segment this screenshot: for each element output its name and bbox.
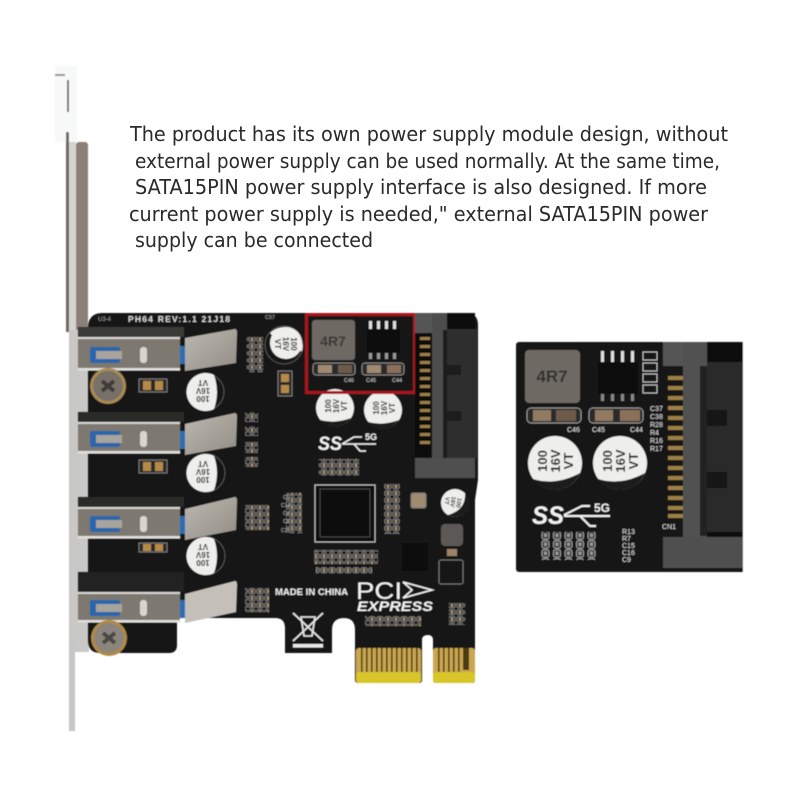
power module: controller chip (367, 321, 400, 359)
PCI Express logo (356, 578, 433, 614)
inset: inductor: 4R7 (536, 367, 568, 386)
SuperSpeed logo: SS (318, 434, 342, 455)
inset: component labels: R13 (622, 529, 635, 536)
capacitor: lower right: 100 (454, 497, 462, 509)
inset: component labels: C16 (622, 550, 635, 557)
power module: inductor (312, 320, 355, 360)
power module: small capacitors: C46 (344, 378, 354, 384)
main controller chip (315, 485, 375, 542)
inset: SuperSpeed logo: SS (532, 502, 564, 530)
capacitor: left 3 (187, 537, 225, 575)
inset: capacitor 2: 16V (613, 449, 628, 473)
inset: SuperSpeed logo: 5G (594, 501, 610, 515)
SATA connector (415, 313, 477, 478)
inset: capacitor 1: 16V (548, 449, 563, 473)
pad labels: C4 (283, 511, 290, 517)
capacitor: left 2: 100 (196, 475, 210, 484)
inset: component labels: C15 (622, 543, 635, 550)
inset: small capacitors: C45 (592, 427, 605, 434)
description text: supply can be connected (135, 228, 373, 252)
capacitor: top: VT (273, 339, 282, 349)
USB port 3 (78, 497, 237, 540)
board silkscreen labels: C97 (265, 315, 275, 321)
capacitor: power 1: VT (340, 401, 349, 411)
inset: component labels: CN1 (662, 524, 676, 531)
mounting screws (90, 368, 127, 656)
inset photo: power module close-up (516, 342, 748, 572)
capacitor: power 1: 16V (332, 398, 341, 413)
capacitor: top: 100 (289, 337, 298, 351)
SuperSpeed logo: 5G (365, 432, 377, 442)
inset: small capacitors (527, 408, 643, 434)
capacitor: power 2: 16V (380, 400, 389, 415)
power module: inductor: 4R7 (320, 333, 346, 349)
SATA pins (420, 337, 430, 444)
board silkscreen labels: PH64 REV:1.1 21J18 (128, 314, 230, 324)
SuperSpeed logo (318, 432, 377, 455)
PCI Express logo: PCI (356, 578, 402, 605)
inset: component labels: R17 (650, 446, 663, 453)
PCB card (78, 313, 478, 683)
capacitor: left 2: VT (198, 459, 208, 468)
lower components (402, 493, 463, 584)
inset: component labels: R4 (650, 430, 659, 437)
USB port 2 (78, 412, 237, 455)
capacitor: left 3: 16V (195, 550, 210, 559)
capacitor: left 1: 16V (195, 386, 210, 395)
capacitor: power 2: VT (388, 403, 397, 413)
capacitor: lower right: VT (442, 496, 450, 505)
inset: component labels: C38 (650, 414, 663, 421)
small pads beside ports (139, 371, 292, 552)
inset: component labels: R7 (622, 536, 631, 543)
inset: small capacitors: C46 (567, 427, 580, 434)
description text: current power supply is needed," external SATA15PIN power (129, 202, 709, 226)
capacitor: left 2 (187, 454, 225, 492)
inset: component labels: C37 (650, 406, 663, 413)
capacitor: left 3: 100 (196, 558, 210, 567)
inset: solder pads (540, 532, 598, 560)
inset: component labels (622, 406, 676, 564)
solder pad clusters (245, 337, 465, 626)
inset: small capacitors: C44 (630, 427, 643, 434)
description text (129, 122, 728, 252)
gold edge fingers (356, 648, 475, 683)
capacitor: left 1 (187, 373, 225, 411)
inset: capacitor 2: 100 (600, 450, 615, 472)
USB port 1 (78, 327, 237, 371)
capacitor: left 1: VT (198, 378, 208, 387)
capacitor: lower right (441, 489, 469, 517)
description text: SATA15PIN power supply interface is also designed. If more (135, 175, 707, 199)
capacitor: left 2: 16V (195, 467, 210, 476)
PCI Express logo: EXPRESS (357, 599, 433, 614)
inset: SATA pins (668, 376, 683, 518)
inset: resistor pads (643, 352, 657, 393)
inset: component labels: R16 (650, 438, 663, 445)
capacitor: power 2: 100 (372, 401, 381, 415)
USB port 4 (78, 572, 237, 623)
inset: controller chip (598, 351, 638, 401)
inset: SATA connector (663, 342, 748, 572)
PCB board (88, 313, 478, 683)
pad labels: C14 (281, 503, 290, 509)
inset: capacitor 2: VT (626, 453, 641, 469)
capacitor: top: 16V (281, 337, 290, 352)
board silkscreen labels: MADE IN CHINA (275, 587, 349, 597)
inset: capacitor 1 (528, 436, 582, 490)
board silkscreen labels: U3-4 (98, 317, 112, 323)
inset: component labels: R28 (650, 422, 663, 429)
pad labels (281, 495, 290, 534)
red highlight box (306, 314, 414, 392)
description text: external power supply can be used normally. At the same time, (135, 149, 720, 173)
board silkscreen labels (98, 314, 349, 597)
capacitor: top (265, 326, 303, 364)
power module: small capacitors: C44 (392, 378, 402, 384)
inset: inductor (525, 350, 580, 403)
inset: component labels: C9 (622, 557, 631, 564)
inset: capacitor 2 (593, 436, 647, 490)
capacitor: power 1: 100 (324, 399, 333, 413)
icon: crossed-out bin (293, 613, 323, 648)
inset: capacitor 1: 100 (535, 450, 550, 472)
power module: small capacitors: C45 (366, 378, 376, 384)
metal bracket (55, 66, 89, 731)
inset: SuperSpeed logo (532, 501, 610, 530)
description text: The product has its own power supply module design, without (129, 122, 728, 146)
pad labels: C3 (283, 519, 290, 525)
capacitor: left 3: VT (198, 542, 208, 551)
capacitor: left 1: 100 (196, 394, 210, 403)
power module: small capacitors (313, 363, 404, 384)
capacitor: power 2 (364, 391, 402, 429)
capacitor: lower right: 16V (448, 496, 456, 507)
inset: capacitor 1: VT (561, 453, 576, 469)
pad labels: C5 (283, 495, 290, 501)
pad labels: C11 (281, 528, 290, 534)
capacitor: power 1 (316, 389, 354, 427)
